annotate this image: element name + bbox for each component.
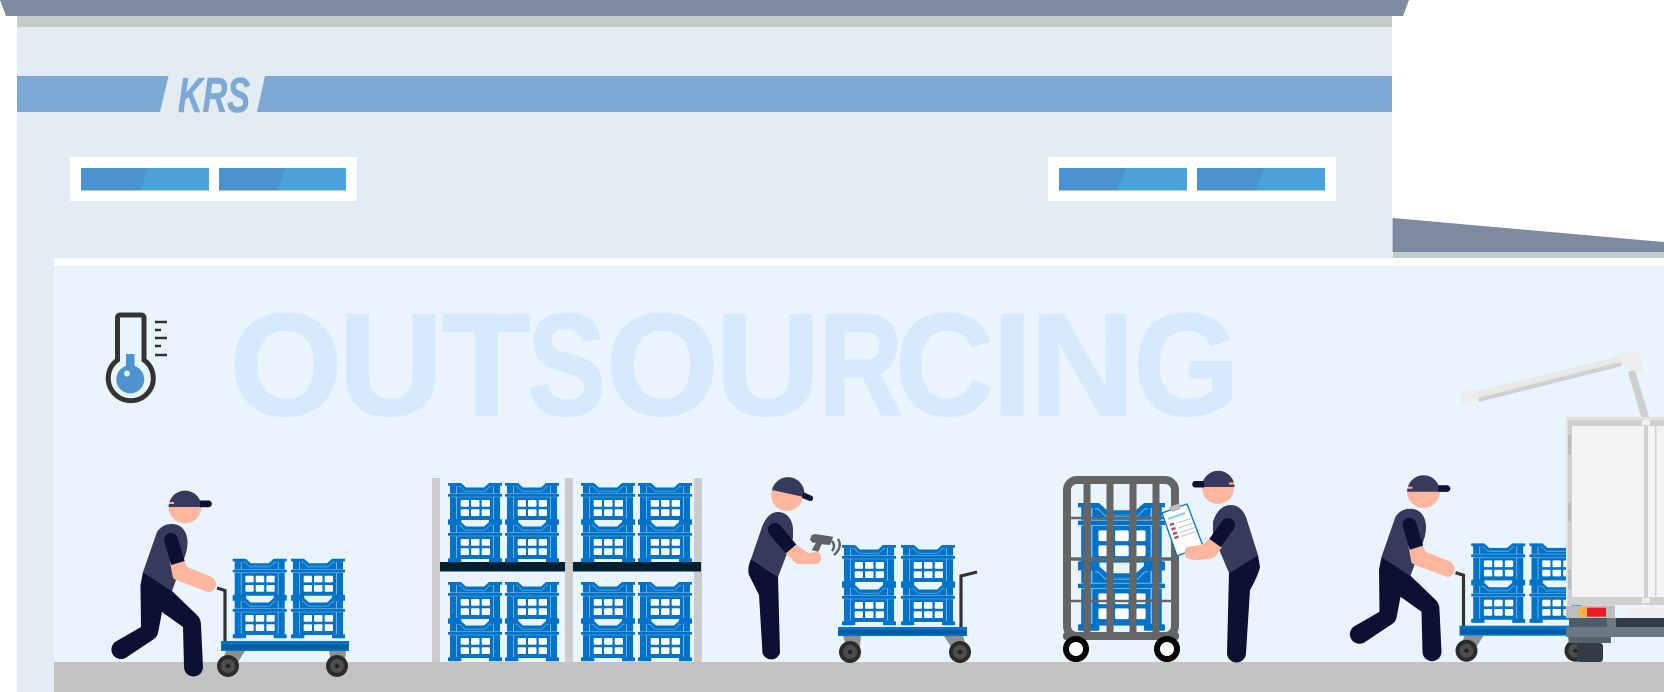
worker walking — [1350, 475, 1454, 661]
tail lights — [1566, 606, 1664, 618]
annex roof — [1392, 218, 1664, 258]
main roof — [0, 0, 1409, 27]
watermark heading: OUT — [230, 284, 531, 446]
roll cage — [1063, 476, 1179, 659]
storage rack with crates — [432, 478, 702, 662]
delivery truck rear — [1566, 417, 1664, 662]
upper building wall — [17, 27, 1392, 692]
scene: worker pushing cart to truck — [1350, 475, 1588, 662]
worker with scanner — [748, 477, 840, 659]
scene: worker pushing cart — [111, 491, 349, 677]
chassis — [1566, 618, 1664, 662]
left window — [70, 157, 357, 201]
warehouse interior — [54, 258, 1664, 662]
KRS logo: KRS — [178, 69, 250, 123]
watermark heading: G — [1134, 284, 1240, 446]
floor — [54, 662, 1664, 692]
watermark heading: S — [527, 284, 606, 446]
clipboard — [1162, 503, 1203, 556]
watermark heading: C — [895, 284, 994, 446]
cargo box — [1566, 417, 1664, 605]
scene: worker scanning crates — [748, 477, 977, 663]
watermark heading: IN — [992, 284, 1135, 446]
barcode scanner — [810, 534, 840, 555]
cart with crates — [1456, 543, 1588, 662]
right window — [1048, 157, 1336, 201]
worker walking — [111, 491, 216, 676]
thermometer icon — [108, 315, 167, 401]
worker with clipboard — [1162, 471, 1260, 662]
truck tail lift arm — [1460, 350, 1650, 420]
cart with crates — [217, 559, 349, 677]
brand stripe with KRS logo — [17, 69, 1392, 123]
scene: worker checking roll cage — [1063, 471, 1260, 662]
watermark heading: OU — [606, 284, 820, 446]
cart with crates — [838, 545, 977, 663]
watermark heading: R — [819, 284, 903, 446]
